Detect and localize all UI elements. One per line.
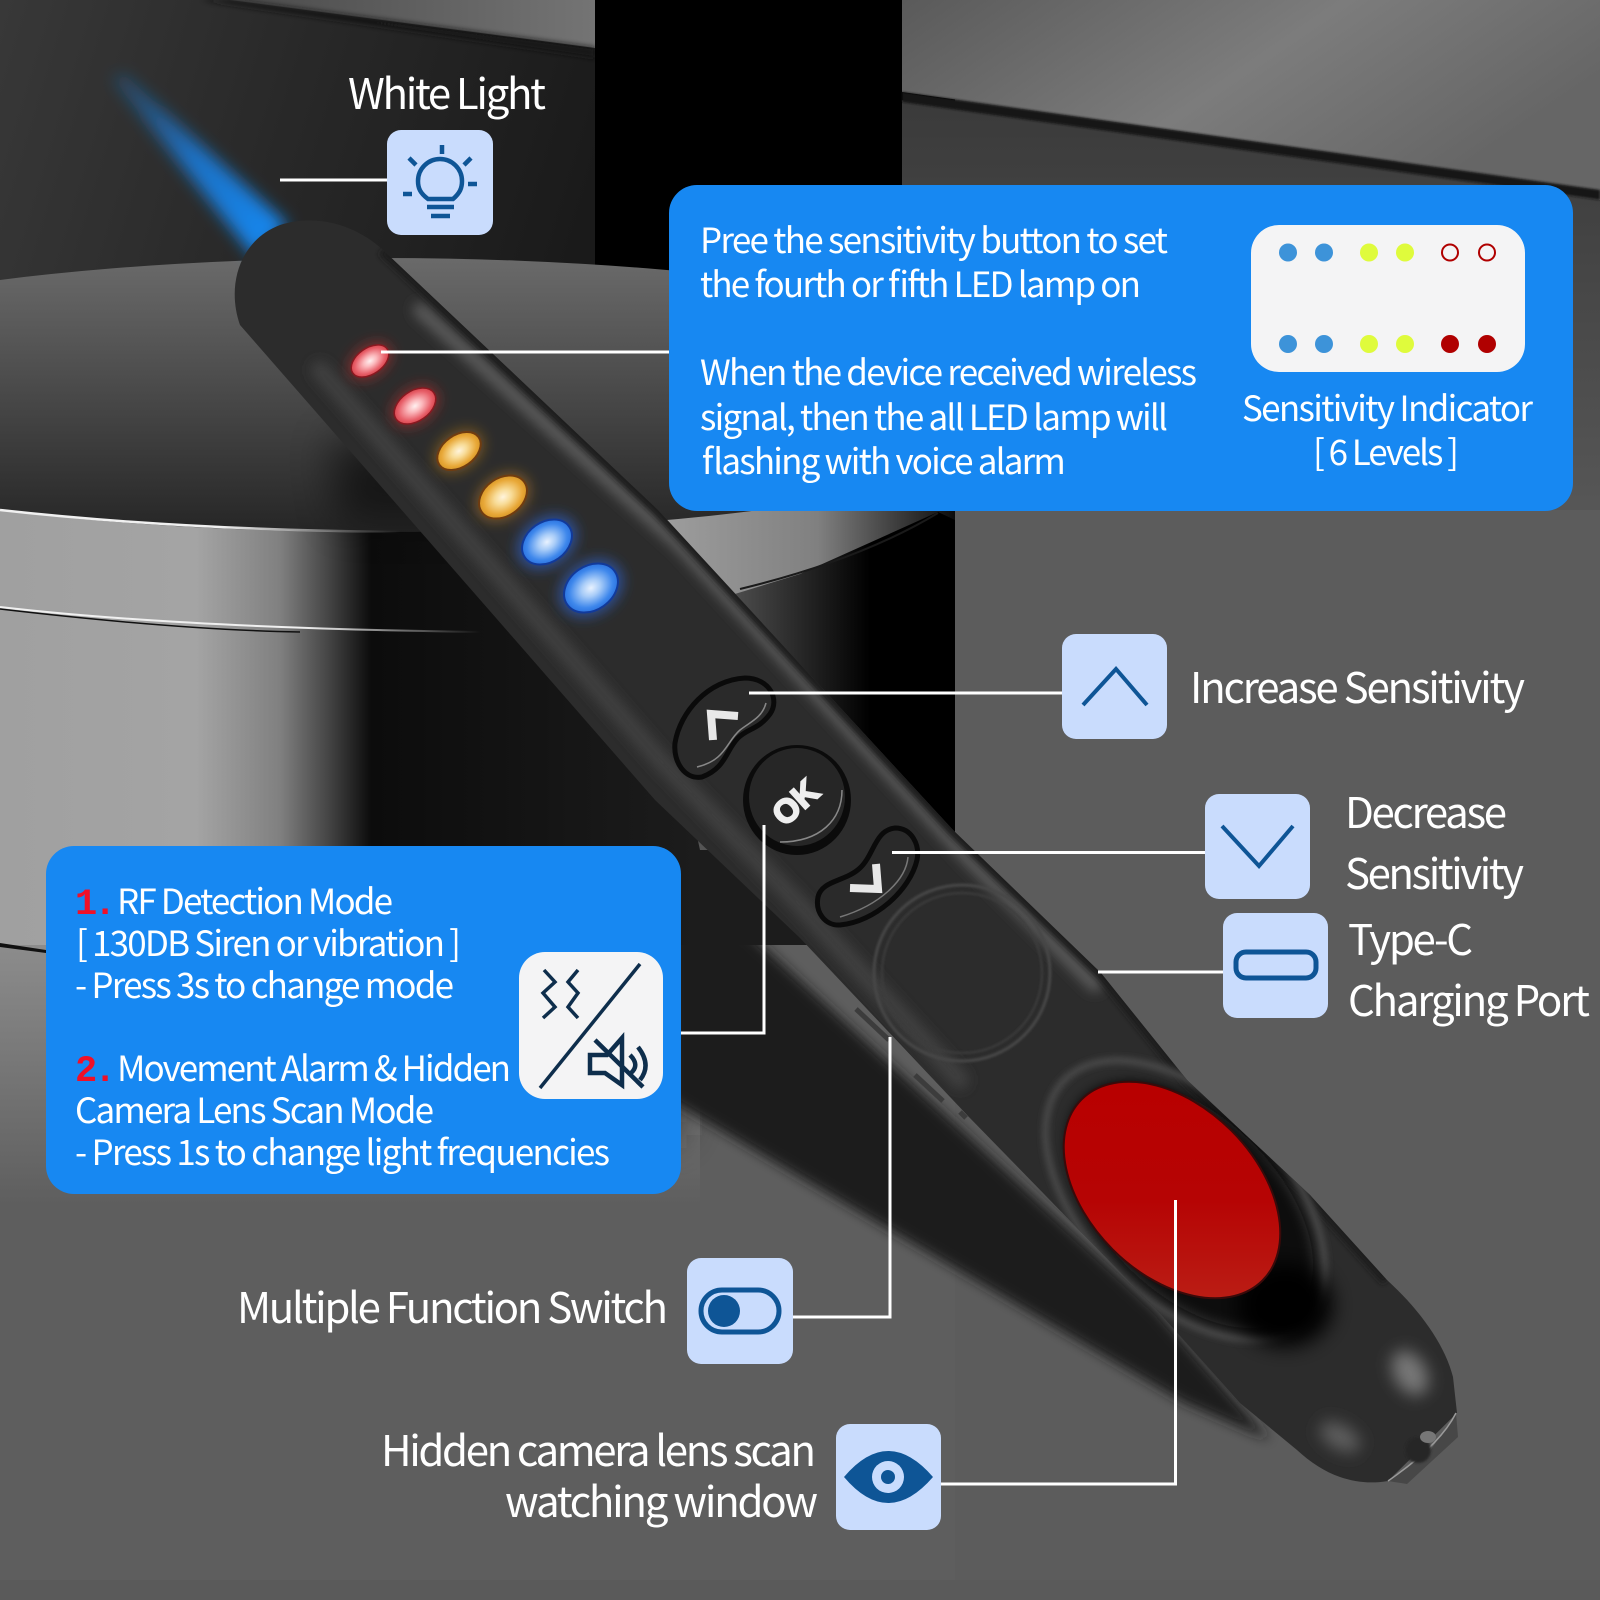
sensitivity indicator dots [1251, 225, 1525, 372]
sensitivity instructions text: signal, then the all LED lamp will [700, 390, 1168, 441]
label: Decrease Sensitivity [1345, 780, 1524, 902]
sensitivity instructions text: Pree the sensitivity button to set [700, 213, 1168, 264]
label: Hidden camera lens scan watching window [381, 1418, 818, 1530]
sensitivity instructions text: the fourth or fifth LED lamp on [700, 257, 1141, 308]
mode 2 text: 2 . [75, 1051, 116, 1093]
label: Type-C Charging Port: Charging Port [1348, 968, 1590, 1029]
label: Type-C Charging Port [1348, 907, 1590, 1029]
label: White Light: White Light [348, 61, 546, 122]
sensitivity indicator caption: Sensitivity Indicator [1242, 381, 1533, 432]
sensitivity instructions text: flashing with voice alarm [702, 434, 1066, 485]
icon: eye [836, 1424, 941, 1530]
sensitivity instructions text: When the device received wireless [700, 345, 1197, 396]
sensitivity indicator caption [1242, 381, 1533, 476]
label: Decrease Sensitivity: Decrease [1345, 780, 1507, 841]
round power button [874, 885, 1050, 1061]
icon: toggle switch [687, 1258, 793, 1364]
mode 1 text: - Press 3s to change mode [75, 958, 454, 1009]
mode 2 text: - Press 1s to change light frequencies [75, 1125, 610, 1176]
label: Increase Sensitivity: Increase Sensitivity [1190, 655, 1525, 716]
mode 2 text: Movement Alarm & Hidden [117, 1041, 511, 1092]
LED indicator lamps [340, 333, 635, 630]
mode 2 text: Camera Lens Scan Mode [75, 1083, 434, 1134]
white light beam [112, 74, 288, 258]
icon: chevron up [1062, 634, 1167, 739]
OK button: OK [765, 772, 826, 833]
icon: vibrate or mute [519, 952, 663, 1099]
mode 1 text: RF Detection Mode [117, 874, 393, 925]
window recess [1040, 1056, 1330, 1344]
label: Hidden camera lens scan watching window: watching window [505, 1469, 818, 1530]
label: Hidden camera lens scan watching window: Hidden camera lens scan [381, 1418, 816, 1479]
OK button [743, 745, 851, 855]
pen shadow [681, 945, 1270, 1442]
mode 2 text [75, 1041, 610, 1176]
mode 1 text [75, 874, 461, 1009]
mode 1 text: 1 . [75, 884, 116, 926]
panel: modes [46, 846, 681, 1194]
device body [235, 220, 1458, 1484]
icon: light bulb [387, 130, 493, 235]
sensitivity instructions text [700, 213, 1197, 485]
label: Multiple Function Switch: Multiple Function Switch [237, 1275, 668, 1336]
sensitivity indicator caption: [ 6 Levels ] [1313, 425, 1459, 476]
mode 1 text: [ 130DB Siren or vibration ] [76, 916, 461, 967]
down button [817, 828, 918, 925]
panel: sensitivity info [669, 185, 1573, 511]
red lens window [1022, 1040, 1322, 1340]
label: Decrease Sensitivity: Sensitivity [1345, 841, 1524, 902]
up button [675, 678, 774, 777]
icon: chevron down [1205, 794, 1310, 899]
connector lines [280, 180, 1223, 1484]
label: Type-C Charging Port: Type-C [1348, 907, 1473, 968]
icon: Type-C port [1223, 913, 1328, 1018]
